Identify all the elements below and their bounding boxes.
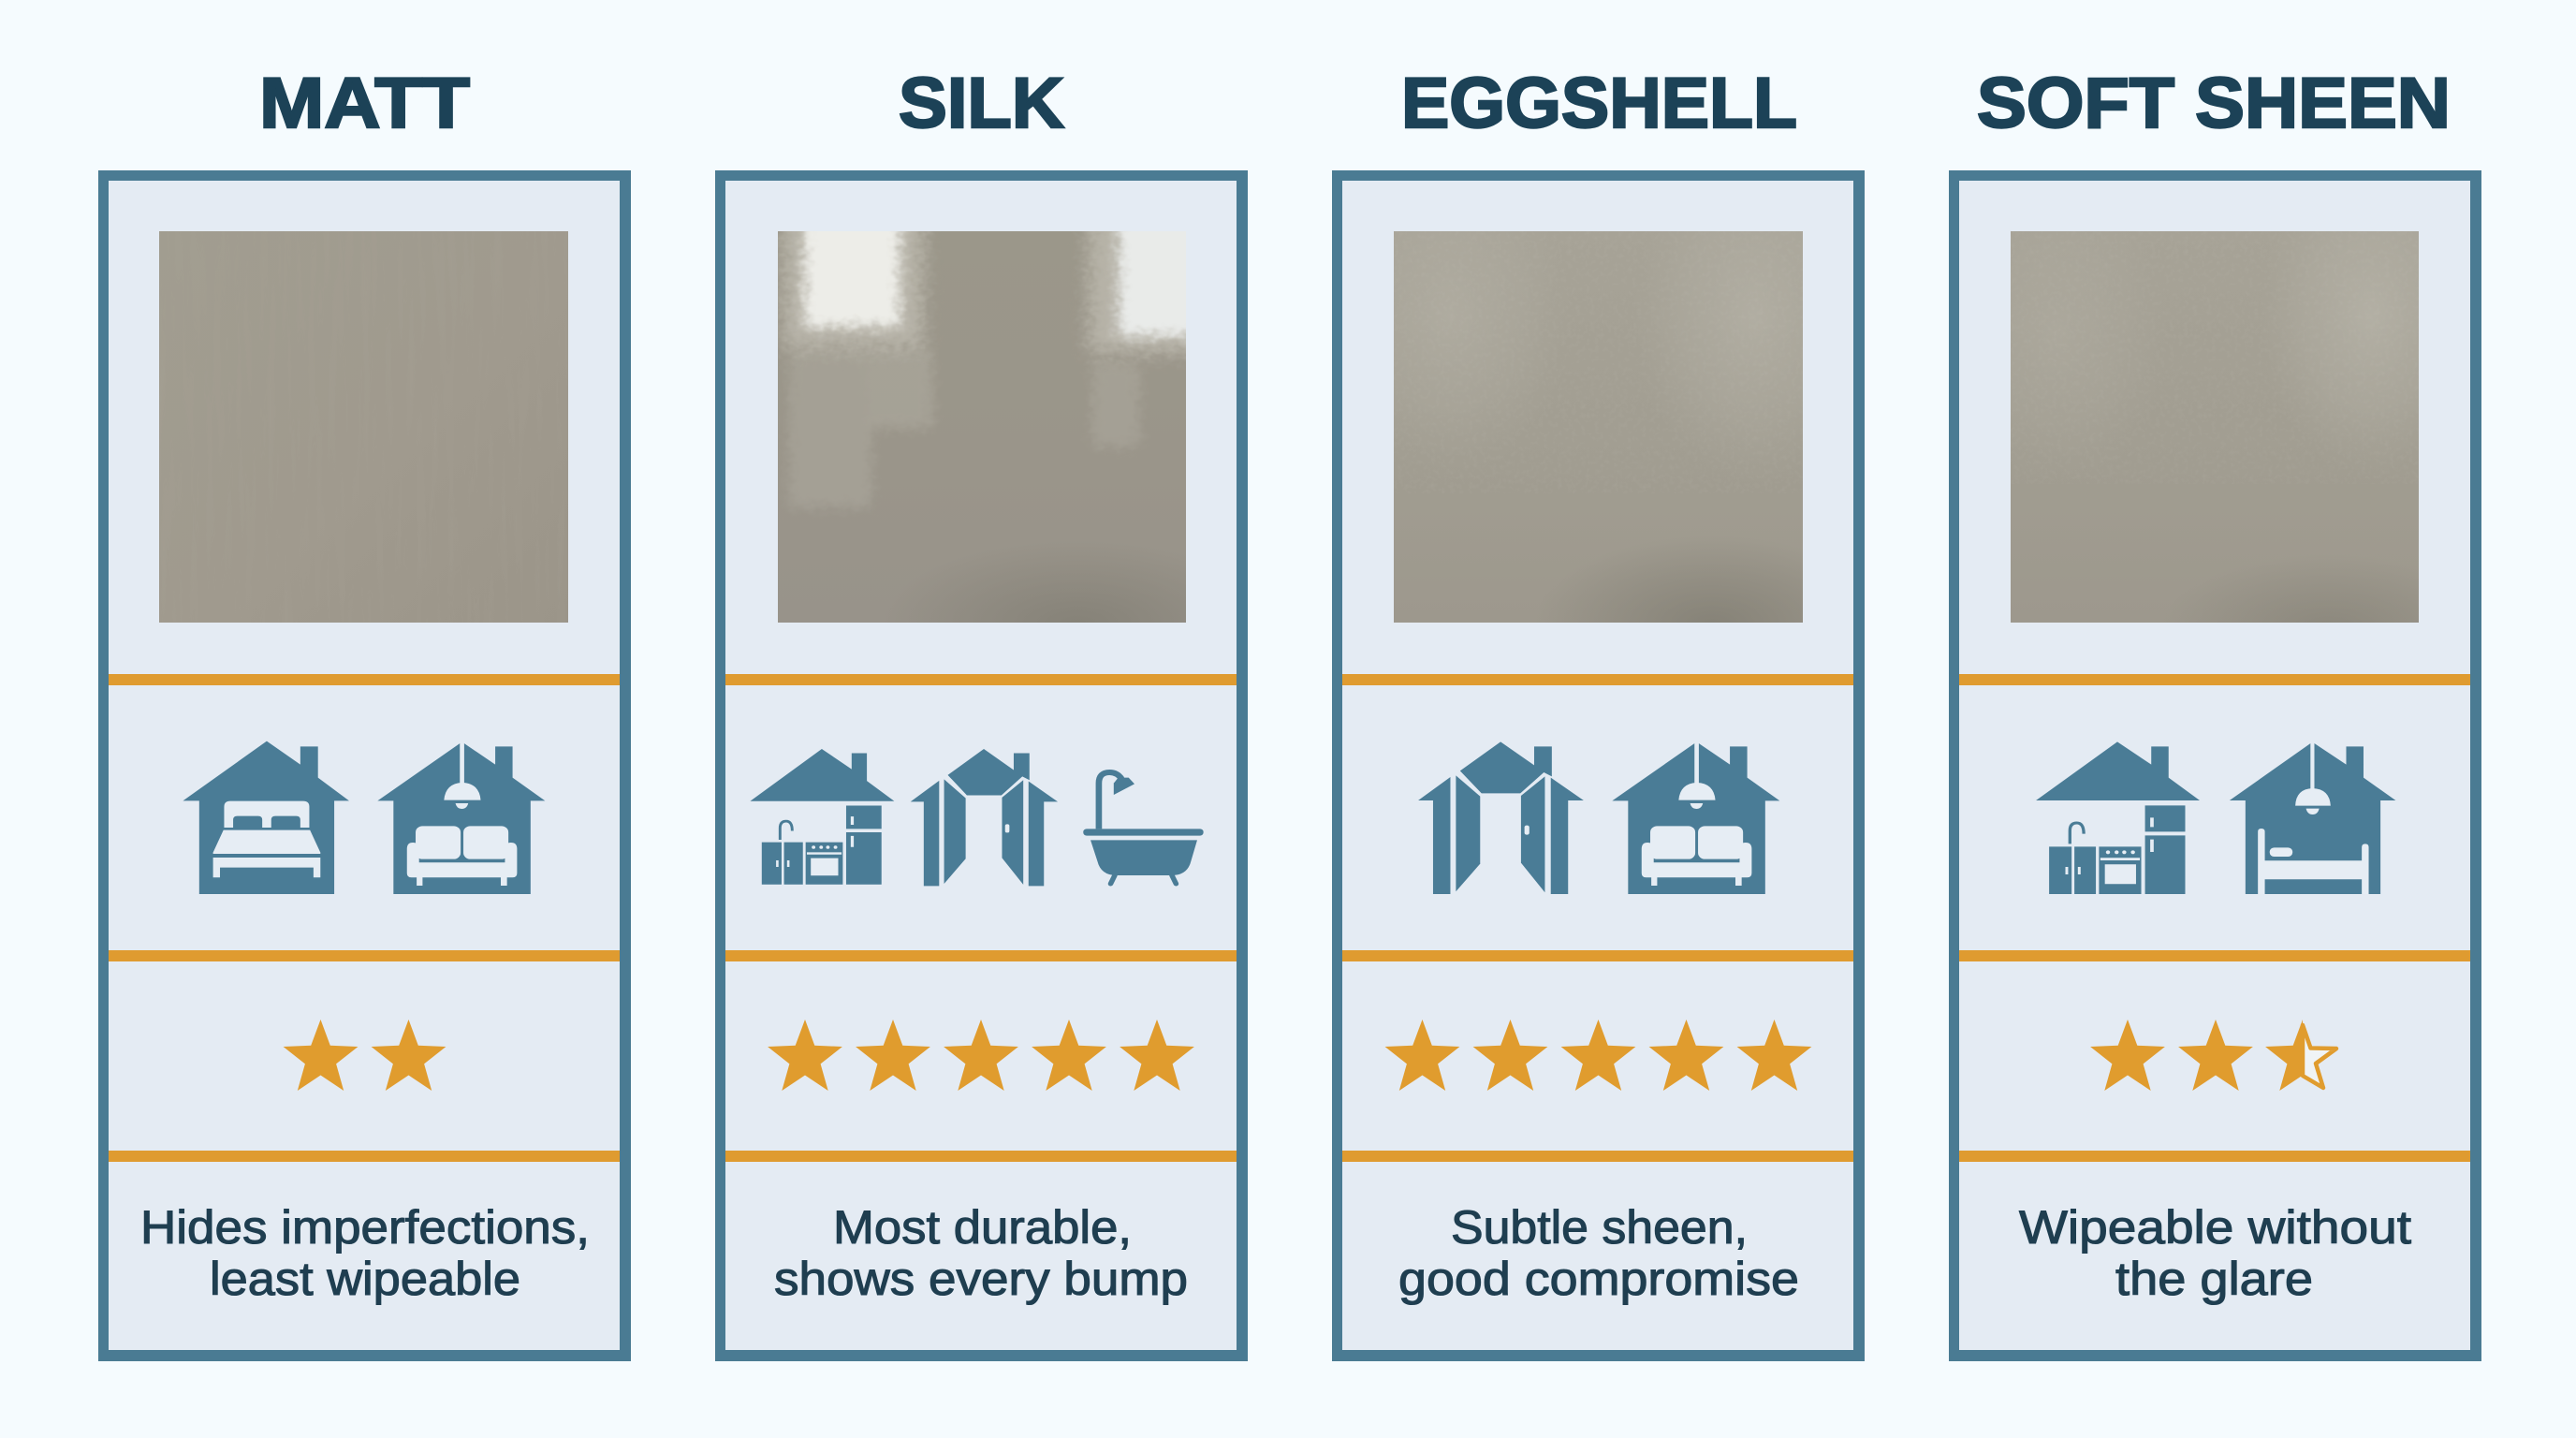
icon: hallway doors bbox=[911, 749, 1058, 886]
description: soft sheen: Wipeable without bbox=[2019, 1201, 2411, 1254]
room icons: bedroom and living room bbox=[183, 741, 545, 894]
description: soft sheen: the glare bbox=[2115, 1253, 2313, 1305]
description: soft sheen bbox=[2019, 1201, 2411, 1305]
panel: soft sheen bbox=[1945, 156, 2497, 1361]
icon: house with kitchen bbox=[2036, 741, 2200, 894]
panel: matt bbox=[98, 170, 631, 1361]
description: eggshell bbox=[1398, 1201, 1799, 1305]
icon: house with kitchen bbox=[750, 749, 894, 885]
description: matt: least wipeable bbox=[210, 1253, 520, 1305]
panel: silk bbox=[715, 170, 1274, 1361]
rating: 5 stars bbox=[768, 1020, 1194, 1091]
icon: house with sofa bbox=[1612, 743, 1779, 894]
description: eggshell: good compromise bbox=[1398, 1253, 1799, 1305]
heading: SILK: SILK bbox=[899, 64, 1064, 143]
icon: house with bed and lamp bbox=[2230, 743, 2395, 894]
heading: EGGSHELL: EGGSHELL bbox=[1401, 64, 1797, 143]
room icons: hallway and living room bbox=[1418, 741, 1779, 894]
swatch: soft sheen paint bbox=[2011, 231, 2419, 623]
icon: house with bed bbox=[183, 741, 349, 894]
rating: 5 stars bbox=[1385, 1020, 1811, 1091]
icon: house with sofa bbox=[377, 743, 545, 894]
rating: 2.5 stars bbox=[2090, 1020, 2336, 1091]
description: silk: shows every bump bbox=[774, 1253, 1188, 1305]
description: matt bbox=[140, 1201, 590, 1305]
heading: MATT: MATT bbox=[259, 64, 470, 143]
room icons: kitchen, hallway, bathroom bbox=[750, 749, 1204, 886]
icon: hallway doors bbox=[1418, 741, 1584, 894]
heading: SOFT SHEEN: SOFT SHEEN bbox=[1977, 64, 2451, 143]
description: silk bbox=[774, 1201, 1188, 1305]
panel: eggshell bbox=[1328, 147, 1890, 1361]
swatch: silk paint with reflections bbox=[778, 231, 1186, 623]
swatch: matt paint bbox=[159, 231, 568, 623]
swatch: eggshell paint bbox=[1394, 231, 1803, 623]
room icons: kitchen and bedroom bbox=[2036, 741, 2395, 894]
icon: bath with shower bbox=[1083, 772, 1204, 884]
half star bbox=[2265, 1020, 2336, 1091]
description: silk: Most durable, bbox=[833, 1201, 1132, 1254]
description: matt: Hides imperfections, bbox=[140, 1201, 590, 1254]
description: eggshell: Subtle sheen, bbox=[1451, 1201, 1748, 1254]
rating: 2 stars bbox=[284, 1020, 446, 1091]
